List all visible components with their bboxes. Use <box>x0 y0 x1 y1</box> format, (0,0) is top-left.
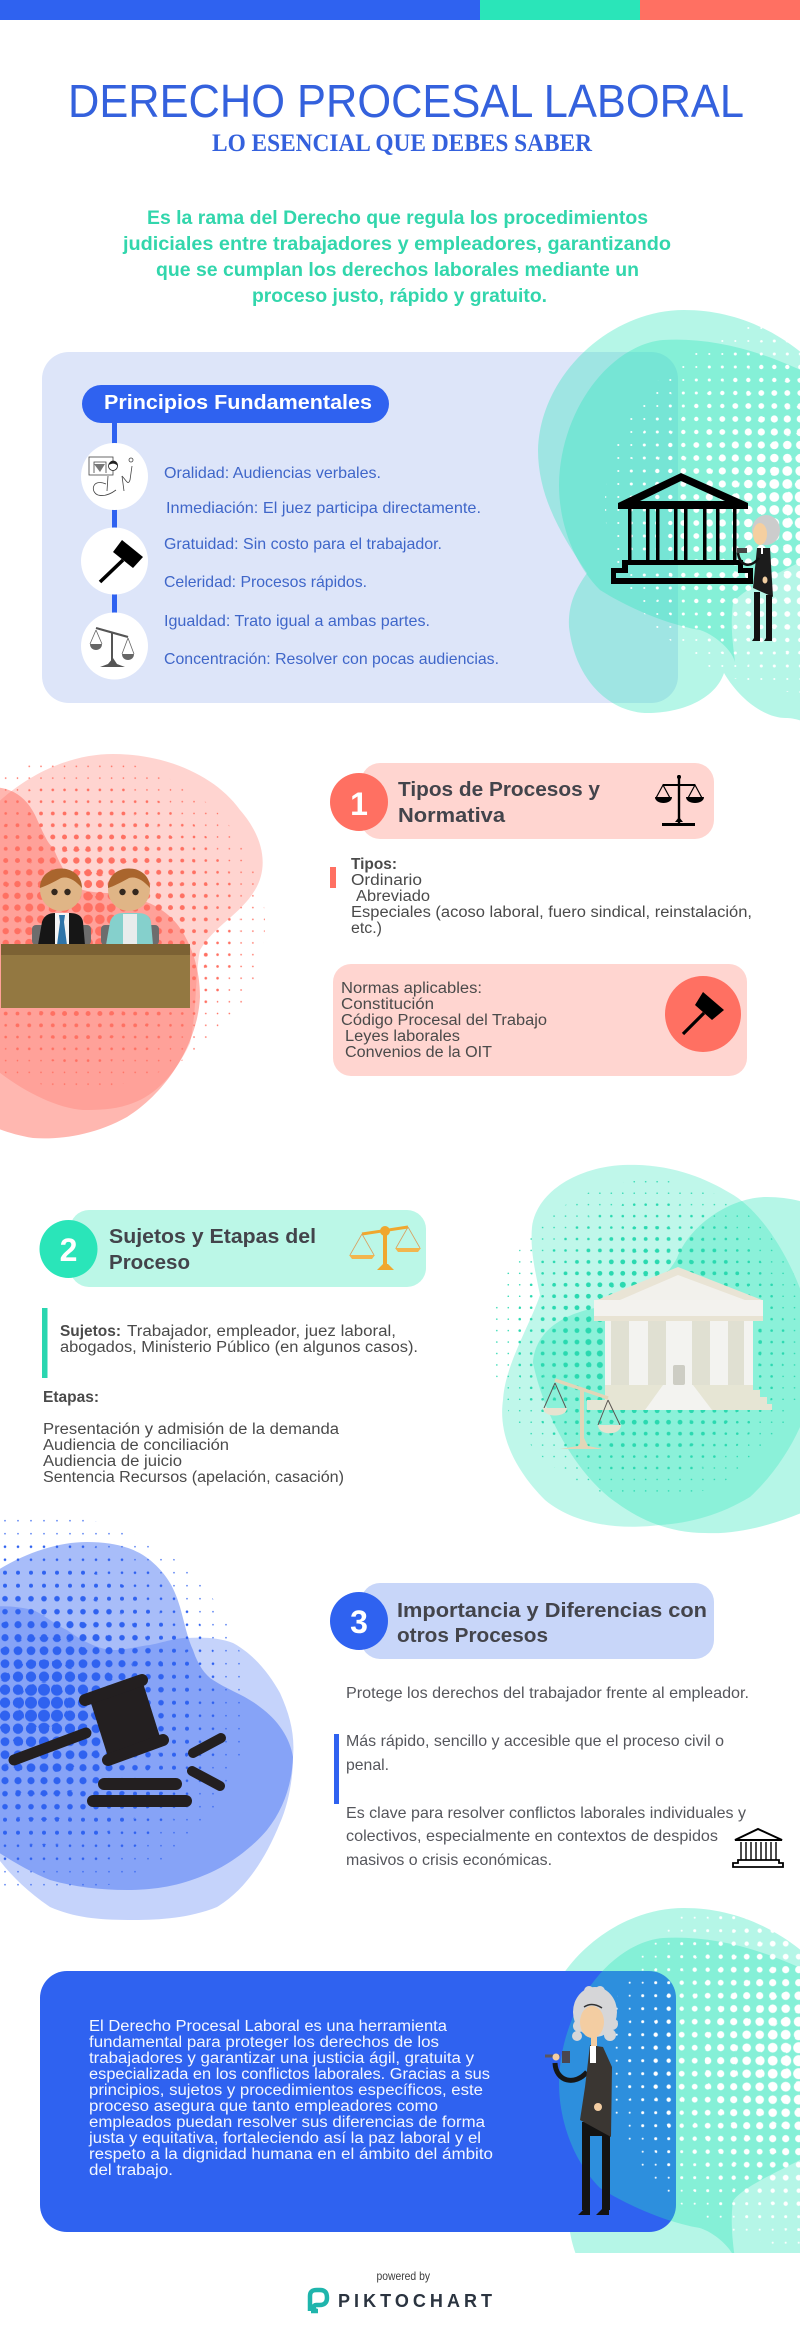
blue accent mark <box>334 1734 339 1804</box>
icon: black scales <box>655 775 704 826</box>
panel: principios fundamentales background <box>42 352 678 703</box>
normas panel: Código Procesal del Trabajo <box>341 1012 547 1029</box>
icon: gavel <box>81 528 148 594</box>
section 3 header: Importancia y Diferencias con <box>397 1600 707 1622</box>
tipos text: Especiales (acoso laboral, fuero sindical, reinstalación, <box>351 904 752 921</box>
teal blobs section 2 <box>502 1165 800 1533</box>
tipos text: Tipos: <box>351 856 397 873</box>
section 1 header: 1 <box>350 786 368 822</box>
sujetos text: Sujetos: <box>60 1323 121 1340</box>
principios heading pill: Principios Fundamentales <box>104 392 372 414</box>
subtitle: LO ESENCIAL QUE DEBES SABER <box>212 130 593 157</box>
importancia text: Es clave para resolver conflictos laborales individuales y <box>346 1805 746 1822</box>
section 1 header: Normativa <box>398 805 506 827</box>
intro paragraph: judiciales entre trabajadores y empleadores, garantizando <box>122 234 671 255</box>
conclusion text: principios, sujetos y procedimientos específicos, este <box>89 2082 483 2099</box>
icon: scales <box>81 612 148 680</box>
normas panel: Normas aplicables: <box>341 980 482 997</box>
halftone dots: coral <box>0 758 265 1088</box>
panel: conclusion background <box>40 1971 676 2232</box>
top colour bar <box>0 0 800 20</box>
etapas text: Audiencia de juicio <box>43 1453 182 1470</box>
importancia text <box>346 1685 749 1869</box>
coral accent mark <box>330 867 336 888</box>
principios list: Gratuidad: Sin costo para el trabajador. <box>164 536 442 553</box>
sujetos text: abogados, Ministerio Público (en algunos casos). <box>60 1339 418 1356</box>
sujetos text <box>60 1323 418 1356</box>
section 3 header: 3 <box>350 1604 368 1640</box>
conclusion text: trabajadores y garantizar una justicia ágil, gratuita y <box>89 2050 474 2067</box>
conclusion text: especializada en los conflictos laborales. Gracias a sus <box>89 2066 490 2083</box>
section 3 header <box>330 1583 714 1659</box>
etapas text: Sentencia Recursos (apelación, casación) <box>43 1469 344 1486</box>
etapas text <box>43 1389 344 1486</box>
title: DERECHO PROCESAL LABORAL <box>68 75 744 127</box>
importancia text: masivos o crisis económicas. <box>346 1852 552 1869</box>
conclusion text <box>88 2018 493 2179</box>
intro paragraph <box>122 208 671 307</box>
halftone dots: white <box>605 316 800 694</box>
intro paragraph: proceso justo, rápido y gratuito. <box>252 286 547 307</box>
illustration: two people at desk <box>1 868 190 1008</box>
principios heading pill <box>82 385 389 423</box>
importancia text: penal. <box>346 1757 389 1774</box>
teal outer blob behind conclusion <box>565 1908 800 2253</box>
timeline line <box>112 423 117 618</box>
section 1 header: Tipos de Procesos y <box>398 779 601 801</box>
coral blobs <box>0 754 263 1138</box>
conclusion text: justa y equitativa, fortaleciendo así la paz laboral y el <box>88 2130 481 2147</box>
normas panel: Constitución <box>341 996 434 1013</box>
etapas text: Audiencia de conciliación <box>43 1437 229 1454</box>
illustration: beige scales <box>543 1380 621 1449</box>
piktochart logo: PIKTOCHART <box>338 2291 492 2311</box>
section 2 header: Sujetos y Etapas del <box>109 1226 316 1248</box>
section 2 header: 2 <box>60 1232 77 1268</box>
principios list: Oralidad: Audiencias verbales. <box>164 465 381 482</box>
sujetos text: Trabajador, empleador, juez laboral, <box>127 1323 396 1340</box>
section 3 header: otros Procesos <box>397 1625 548 1647</box>
etapas text: Etapas: <box>43 1389 99 1406</box>
conclusion text: del trabajo. <box>89 2162 173 2179</box>
conclusion text: empleados puedan resolver sus diferencias de forma <box>89 2114 485 2131</box>
intro paragraph: que se cumplan los derechos laborales mediante un <box>156 260 639 281</box>
illustration: judge small <box>737 515 780 641</box>
section 2 header <box>40 1210 426 1287</box>
importancia text: Protege los derechos del trabajador frente al empleador. <box>346 1685 749 1702</box>
section 1 header <box>330 763 714 839</box>
conclusion text: proceso asegura que tanto empleadores como <box>89 2098 438 2115</box>
normas panel: Leyes laborales <box>345 1028 460 1045</box>
normas panel: Convenios de la OIT <box>345 1044 493 1061</box>
normas panel <box>333 964 747 1076</box>
tipos text: etc.) <box>351 920 382 937</box>
principios list: Igualdad: Trato igual a ambas partes. <box>164 613 430 630</box>
conclusion text: El Derecho Procesal Laboral es una herramienta <box>89 2018 447 2035</box>
principios list: Inmediación: El juez participa directamente. <box>166 500 481 517</box>
halftone dots: blue <box>0 1515 248 1895</box>
importancia text: colectivos, especialmente en contextos de despidos <box>346 1828 718 1845</box>
illustration: judge large <box>545 1986 618 2215</box>
conclusion text: respeto a la dignidad humana en el ámbito del ámbito <box>89 2146 493 2163</box>
illustration: courthouse <box>587 1267 772 1410</box>
icon: small temple <box>733 1829 783 1867</box>
tipos text: Ordinario <box>351 872 422 889</box>
illustration: black temple <box>611 473 753 584</box>
tipos text <box>351 856 752 937</box>
powered by label: powered by <box>376 2269 430 2283</box>
icon: person with magnifier <box>81 443 148 510</box>
teal accent mark <box>42 1308 48 1378</box>
etapas text: Presentación y admisión de la demanda <box>43 1421 339 1438</box>
intro paragraph: Es la rama del Derecho que regula los procedimientos <box>147 208 648 229</box>
principios list <box>164 465 499 668</box>
principios list: Celeridad: Procesos rápidos. <box>164 574 367 591</box>
conclusion text: fundamental para proteger los derechos de los <box>89 2034 439 2051</box>
section 2 header: Proceso <box>109 1252 190 1274</box>
teal inner blob over conclusion panel <box>559 1938 800 2260</box>
icon: gold scales <box>349 1226 421 1270</box>
blue blobs section 3 <box>0 1542 293 1920</box>
halftone dots: teal <box>492 1180 800 1500</box>
halftone dots: white bottom <box>616 1916 800 2244</box>
teal blobs behind temple <box>538 310 800 735</box>
tipos text: Abreviado <box>356 888 430 905</box>
illustration: large gavel <box>14 1680 221 1801</box>
importancia text: Más rápido, sencillo y accesible que el proceso civil o <box>346 1733 724 1750</box>
principios list: Concentración: Resolver con pocas audiencias. <box>164 651 499 668</box>
icon: gavel in coral circle <box>665 976 741 1052</box>
